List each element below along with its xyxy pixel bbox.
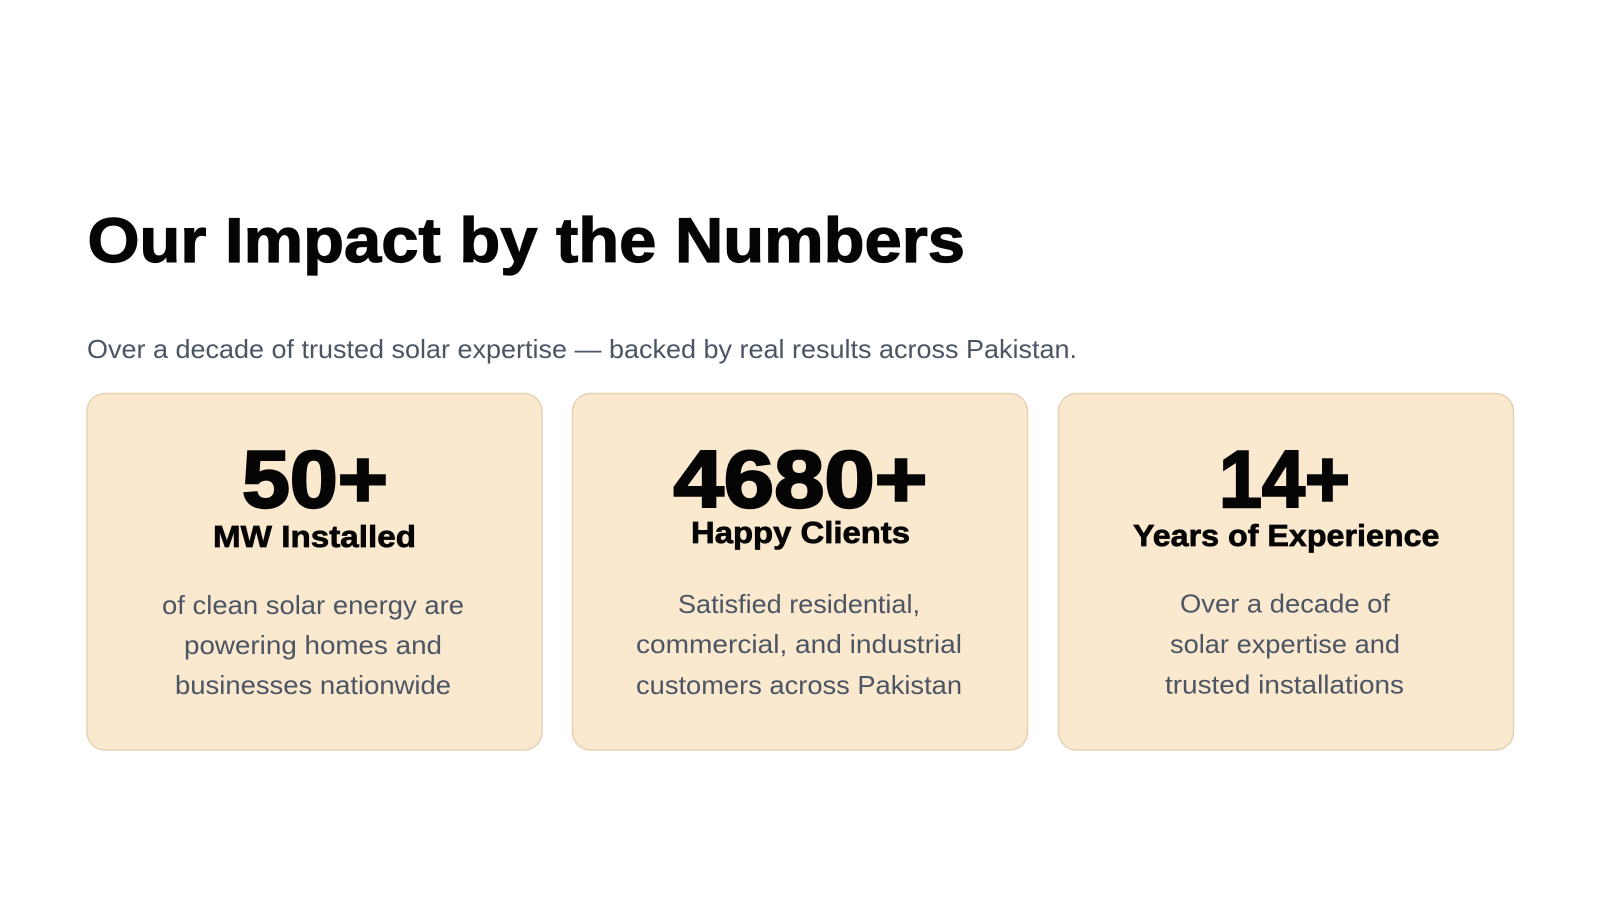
- description: businesses nationwide: [175, 670, 451, 700]
- stat label: Happy Clients: Happy Clients: [691, 515, 910, 550]
- description: trusted installations: [1165, 670, 1404, 700]
- description: customers across Pakistan: [636, 670, 962, 700]
- card background: [572, 394, 1028, 750]
- panel: MW installed: [87, 394, 542, 750]
- card background: [87, 394, 542, 750]
- panel: happy clients: [572, 394, 1028, 750]
- description: Satisfied residential,: [678, 589, 920, 619]
- description: [636, 589, 962, 700]
- description: solar expertise and: [1170, 629, 1400, 659]
- description: [1165, 588, 1404, 700]
- stat number: 4680+: 4680+: [674, 435, 928, 525]
- subtitle: Over a decade of trusted solar expertise — backed by real results across Pakistan.: [87, 334, 1077, 364]
- panel: years of experience: [1058, 394, 1514, 750]
- description: powering homes and: [184, 630, 442, 660]
- card background: [1058, 394, 1514, 750]
- stat label: Years of Experience: Years of Experience: [1133, 518, 1440, 553]
- title: Our Impact by the Numbers: [88, 206, 965, 276]
- description: commercial, and industrial: [636, 629, 962, 659]
- stat number: 14+: 14+: [1219, 435, 1350, 525]
- description: Over a decade of: [1180, 588, 1391, 618]
- description: [162, 590, 464, 700]
- stat number: 50+: 50+: [242, 435, 388, 525]
- stat label: MW Installed: MW Installed: [213, 519, 416, 554]
- description: of clean solar energy are: [162, 590, 464, 620]
